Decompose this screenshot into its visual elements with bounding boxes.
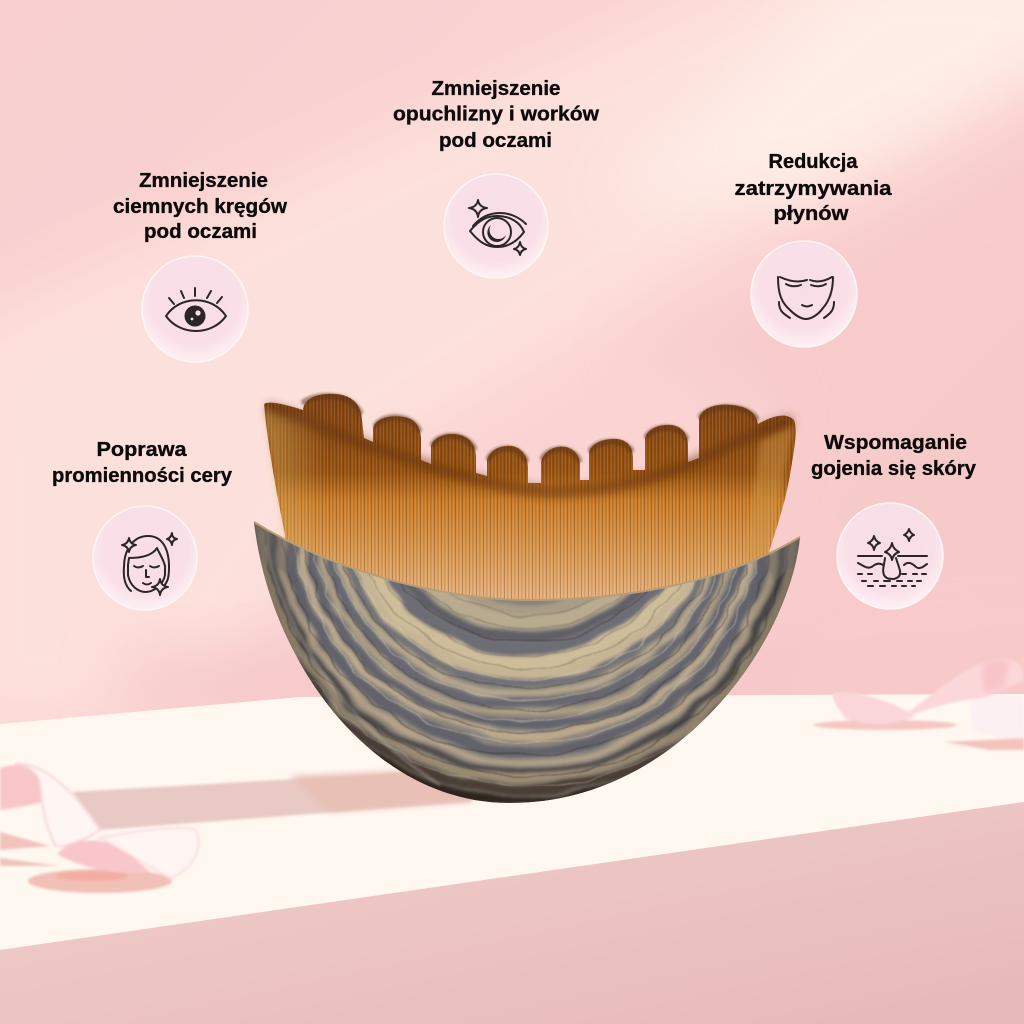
right golden bristle edge bbox=[745, 425, 794, 560]
callout: fluid retention bbox=[734, 150, 892, 347]
heading: radiance bbox=[52, 438, 233, 487]
left golden bristle edge bbox=[264, 408, 325, 560]
callout: puffiness bbox=[393, 77, 599, 278]
callout: dark circles bbox=[113, 169, 287, 362]
brush shadow on table bbox=[72, 767, 500, 830]
heading: skin healing: Wspomaganie bbox=[824, 431, 967, 454]
heading: dark circles: ciemnych kręgów bbox=[113, 195, 287, 218]
tuft tips bbox=[304, 396, 756, 460]
icon disc: eye with lashes bbox=[142, 256, 248, 362]
icon disc: face bbox=[751, 241, 857, 347]
handle fine grain bbox=[262, 528, 800, 786]
icon disc: skin layers with sparkles bbox=[837, 503, 943, 609]
heading: fluid retention bbox=[734, 150, 892, 225]
heading: fluid retention: zatrzymywania bbox=[734, 177, 892, 200]
table front face bbox=[0, 802, 1024, 1024]
heading: radiance: promienności cery bbox=[52, 464, 233, 487]
heading: dark circles bbox=[113, 169, 287, 243]
heading: fluid retention: Redukcja bbox=[768, 150, 858, 173]
heading: puffiness: pod oczami bbox=[439, 129, 552, 152]
ridge shadow along bristle tips bbox=[268, 408, 792, 492]
icon disc: eye with sparkles bbox=[444, 174, 548, 278]
heading: fluid retention: płynów bbox=[774, 202, 849, 225]
icon disc: face with sparkles bbox=[93, 506, 197, 610]
handle left highlight bbox=[266, 545, 440, 785]
callout: radiance bbox=[52, 438, 233, 610]
callout: skin healing bbox=[811, 431, 977, 609]
heading: puffiness: opuchlizny i worków bbox=[393, 102, 599, 126]
heading: dark circles: pod oczami bbox=[144, 220, 257, 243]
brush wooden handle bbox=[254, 523, 800, 803]
heading: skin healing: gojenia się skóry bbox=[811, 457, 977, 480]
heading: radiance: Poprawa bbox=[96, 438, 187, 461]
ribbon: right bbox=[813, 658, 1024, 750]
heading: puffiness bbox=[393, 77, 599, 152]
ribbon: left bbox=[0, 764, 199, 893]
handle edge shading bbox=[250, 510, 810, 810]
product: brush bbox=[254, 391, 800, 803]
handle rim bbox=[254, 522, 800, 600]
heading: dark circles: Zmniejszenie bbox=[139, 169, 268, 192]
heading: skin healing bbox=[811, 431, 977, 480]
brush bristles bbox=[264, 394, 796, 600]
table top surface bbox=[0, 694, 1024, 950]
background: pink wall with light beam bbox=[0, 0, 1024, 724]
heading: puffiness: Zmniejszenie bbox=[432, 77, 560, 100]
